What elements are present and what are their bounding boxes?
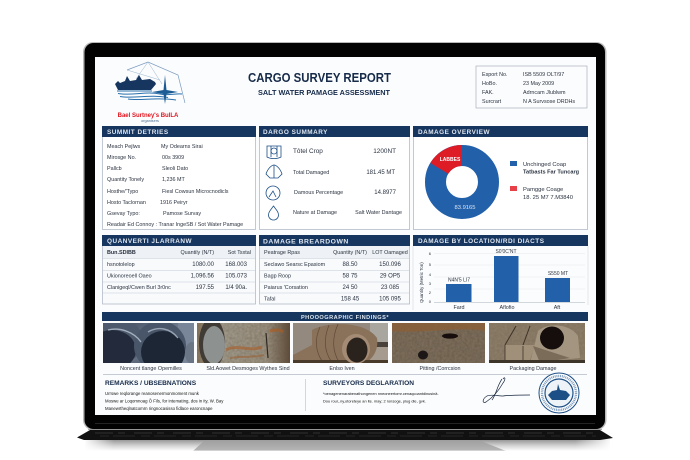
panel: quantity summary table: hsnotolelop [107,262,135,268]
panel: quantity summary table: QUANVERTI JLARRANW [107,238,192,245]
logo: Bael Surtney's BulLA [118,113,179,119]
donut legend: Unchinged Coap [523,162,566,168]
panel: damage overview: DAMAGE OVERVIEW [418,129,490,136]
report info box: FAK. [482,90,494,96]
remarks: REMARKS / UBSEBNATIONS [105,380,197,387]
laptop lid [83,42,606,430]
icon: gauge [266,186,280,200]
seal [539,373,579,413]
report info box: Adrncam Jlublwm [523,90,566,96]
photo captions [120,366,557,372]
laptop hinge base [77,430,613,440]
photo: coil end [293,323,388,363]
report info box: HoBo. [482,81,497,87]
signature [483,378,530,402]
donut legend: 18. 25 M7 7.M3840 [523,195,573,201]
bar chart: 5 [429,262,432,267]
report info box: Esport No. [482,72,507,78]
donut legend: Pamgge Coage [523,187,563,193]
report info box: 23 May 2009 [523,81,554,87]
panel: cargo summary: 14.8977 [374,190,397,196]
panel: survey entries: 1,236 MT [162,177,185,183]
panel: survey entries: 1916 Peiryr [160,200,188,206]
panel: damage breakdown table: LOT Oamaged [372,250,408,256]
panel: damage breakdown table [259,235,410,304]
panel: cargo summary: DARGO SUMMARY [263,129,328,136]
photo: rusted coil [197,323,290,363]
remarks: Moswe ar Loqomnoag Ö Fils, for intemating, dos in ity, W. Bay [105,398,224,404]
report info box: Surcrart [482,99,502,105]
bar chart: 0 [429,299,432,304]
remarks: Urrswe reqlorange reanosenermonmoment munk [105,391,200,396]
bar chart: 4 [429,272,432,277]
panel: damage by location [413,235,588,311]
panel: survey entries: Mirosge No. [107,155,136,161]
panel: damage breakdown table: Paiarus 'Corsation [264,285,308,291]
panel: quantity summary table [102,235,256,304]
panel: damage breakdown table: Seclawo Searsc Epasiom [264,262,326,268]
photo captions: Pitting /Corrcsion [419,366,461,372]
bar chart: Quantity (Metric Ton) [419,262,424,303]
panel: quantity summary table: Ukionoreoell Oaeo [107,274,152,280]
panel: cargo summary: Salt Water Dantage [355,210,402,216]
panel: quantity summary table: 197.55 [196,285,215,291]
panel: survey entries [102,126,256,230]
panel: quantity summary table: Clanigeql/Cwen Burl 3r0nc [107,285,171,291]
photo captions: Noncent tlange Opemilles [120,366,182,372]
panel: cargo summary: 181.45 MT [366,170,395,176]
title: CARGO SURVEY REPORT [248,71,391,85]
panel: survey entries: 00s 3909 [162,155,184,161]
panel: damage breakdown table: Peatrage Rpas [264,250,300,256]
photo captions: Sld.Aowet Desmoges Wythes Sind [206,366,290,372]
bar chart: 3 [429,281,432,286]
panel: cargo summary: Nature at Damage [293,210,337,216]
laptop base shadow [84,439,612,452]
panel: quantity summary table: 105.073 [225,274,248,280]
donut legend [510,161,580,201]
bar chart: 2 [429,290,432,295]
panel: survey entries: Sleoli Dato [162,166,188,172]
bar chart: S550 MT [548,271,568,277]
title [248,71,391,97]
panel: quantity summary table: 168.003 [225,262,248,268]
surveyor declaration: SURVEYORS DEGLARATION [323,380,414,387]
report info box [476,66,587,108]
bar chart: Aft [554,305,561,311]
panel: cargo summary [259,126,410,230]
section heading: photographic findings: PHOOOGRAPHIC FINDINGS* [301,315,389,321]
panel: cargo summary: 1200NT [373,148,396,155]
logo [115,62,185,123]
panel: damage breakdown table: DAMAGE BREARDOWN [263,238,349,246]
panel: quantity summary table: Bun.SDIBB [107,250,136,256]
panel: survey entries: Readair Ed Connoy : Tranar IngeSB / Sot Water Pamage [107,222,243,228]
bar chart: Fard [453,305,465,311]
section heading: photographic findings [102,312,588,321]
panel: damage breakdown table: 29 OP5 [380,274,401,280]
panel: damage breakdown table: 150.096 [379,262,402,268]
panel: cargo summary: Total Damaged [293,170,329,176]
panel: damage breakdown table: 88.50 [342,262,358,268]
panel: survey entries: Pallcb [107,166,122,172]
remarks [105,380,224,411]
panel: damage breakdown table: 23 085 [381,285,400,291]
panel: damage overview [413,126,588,230]
panel: damage breakdown table: 58 75 [342,274,358,280]
photo: pitting corrosion [392,323,485,363]
photo: steel coils [103,323,194,363]
panel: damage breakdown table: 158 45 [341,296,360,302]
donut chart: 83.9165 [455,205,475,211]
donut chart [430,145,488,211]
bar chart: S0'0C'NT [495,249,517,255]
panel: damage breakdown table: 105 095 [379,296,402,302]
panel: cargo summary: Damous Percentage [294,190,343,196]
panel: survey entries: Gsevay Typo: [107,211,140,217]
bar chart [419,249,585,311]
photo: packaging damage [489,323,585,363]
panel: damage breakdown table: 24 50 [342,285,358,291]
panel: damage breakdown table: Bagp Roop [264,274,291,280]
photo captions: Packaging Damage [509,366,557,372]
panel: cargo summary: Tôtel Crop [293,148,323,155]
surveyor declaration: Dou rour,.ny,otoreteye an ite. may; 2 ronsoge, plug dle, gvk. [323,398,426,404]
panel: quantity summary table: 1/4 90а. [225,285,247,291]
bar chart: Aflofio [500,305,514,311]
panel: quantity summary table: 1,096.56 [191,274,215,280]
panel: survey entries: Hosthe/'Typo [107,189,138,195]
logo: organisers [141,119,159,123]
report screen [88,57,596,415]
panel: damage breakdown table: Tafal [264,296,275,302]
panel: survey entries: SUMMIT DETRIES [107,129,169,136]
report info box: ISB 5509 OLT/97 [523,72,564,78]
photo captions: Enlso Iven [329,366,355,372]
report info box: N A Survsose DRDHs [523,99,575,105]
panel: quantity summary table: Quantily (N/T) [180,250,214,256]
remarks: Manewrtheqlnatcomrn ringnocasisso fidlace earoncnape [105,406,213,411]
panel: damage by location: DAMAGE BY LOCATION/RDI DIACTS [418,238,545,245]
panel: survey entries: My Odearns Sirai [161,144,203,150]
icon: coil [267,146,281,158]
panel: damage breakdown table: Quantity (N/T) [333,250,367,256]
icon: ship [266,165,282,178]
donut chart: LABBES [440,157,461,163]
bar chart: 6 [429,251,432,256]
icon: water drop [268,206,278,220]
title: SALT WATER PAMAGE ASSESSMENT [258,88,391,97]
surveyor declaration [323,380,439,404]
panel: survey entries: Quantity Tonely [107,177,144,183]
donut legend: Tatbasts Far Tuncarg [523,170,580,176]
panel: survey entries: Meach Pejlws [107,144,141,150]
panel: quantity summary table: 1080.00 [192,262,215,268]
panel: survey entries: Pamose Survay [163,211,201,217]
surveyor declaration: *oenagenenarabenathongenen nneoneertomr.cenaqcoantdinusinä. [323,391,439,396]
panel: survey entries: Hosto Taclornan [107,200,146,206]
panel: quantity summary table: Sot Tsxtal [228,250,251,256]
bar chart: N4N'5 LI7 [448,278,470,284]
panel: survey entries: Fiesl Cowsun Microcnodicls [162,189,229,195]
